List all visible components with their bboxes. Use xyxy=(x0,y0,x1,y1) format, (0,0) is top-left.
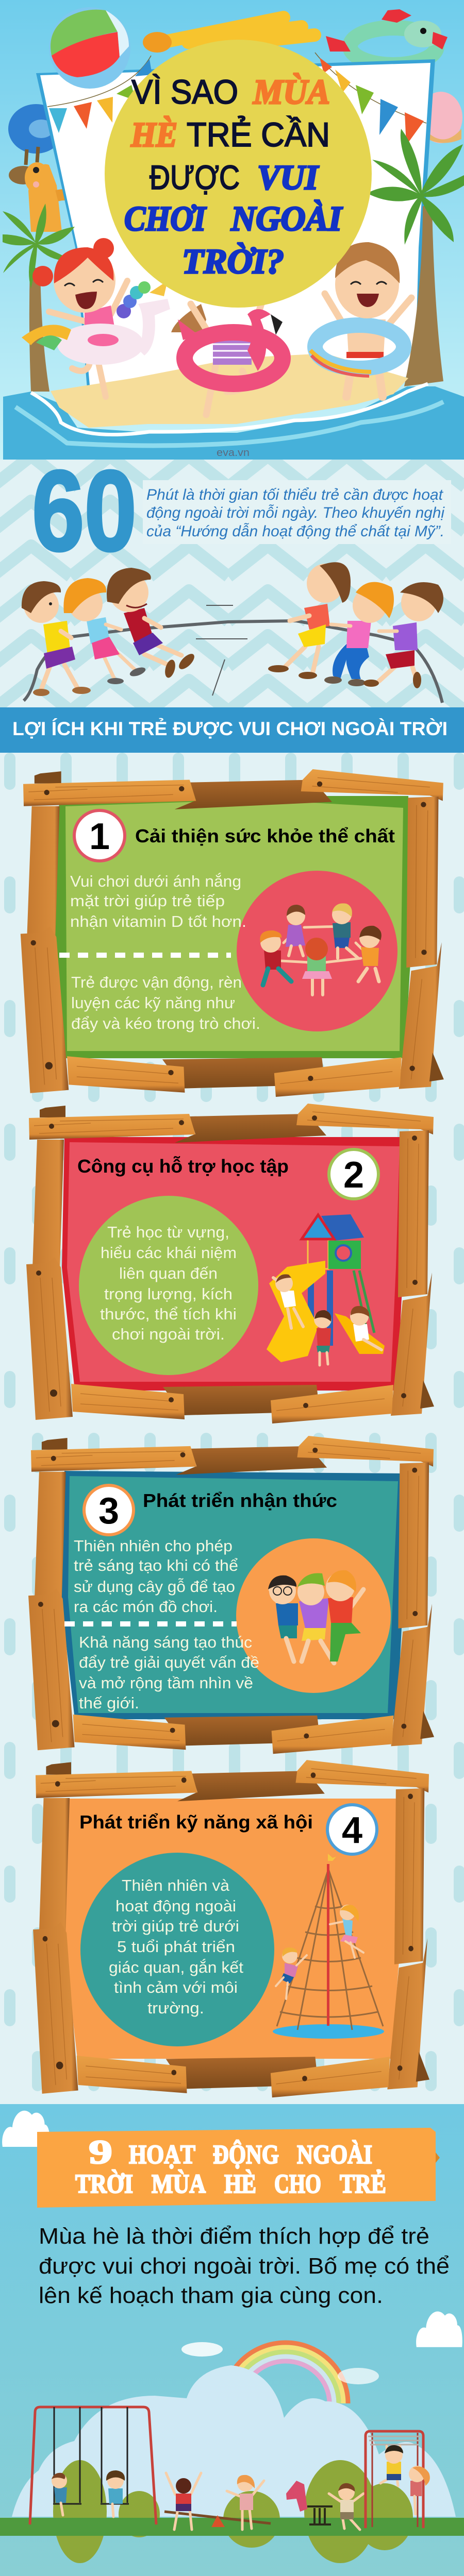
illustration: playground scene xyxy=(0,2342,464,2563)
foam xyxy=(31,384,428,435)
illustration: kids in a circle xyxy=(237,871,397,1031)
intro text: summer: Mùa hè là thời điểm thích hợp để trẻ xyxy=(39,2224,429,2249)
bubble with text: learning: chơi ngoài trời. xyxy=(112,1325,225,1343)
panel: benefit 1 xyxy=(21,769,444,1097)
text: creativity: trẻ sáng tạo khi có thể xyxy=(74,1556,238,1574)
heading: Công cụ hỗ trợ học tập xyxy=(77,1156,289,1177)
number 3 xyxy=(84,1485,134,1535)
panel: benefit 3 xyxy=(28,1436,434,1754)
kid 1 xyxy=(22,581,91,696)
icon: blue ring float xyxy=(8,104,64,154)
text: problem solving: thế giới. xyxy=(79,1694,139,1712)
seesaw xyxy=(164,2473,271,2530)
wood frame xyxy=(21,769,444,1097)
bubble with text: learning: hiểu các khái niệm xyxy=(101,1244,237,1262)
text: skills xyxy=(71,973,260,1032)
number 3: 3 xyxy=(98,1490,119,1532)
bubble with text: social: hoạt động ngoài xyxy=(115,1897,236,1915)
title: ĐƯỢC xyxy=(150,158,240,196)
bubble with text: learning: liên quan đến xyxy=(119,1264,218,1282)
heading band: benefits xyxy=(0,707,464,753)
panel background xyxy=(63,1799,405,2059)
intro text: summer xyxy=(39,2224,450,2308)
text: creativity xyxy=(74,1537,238,1616)
icon: right palm tree xyxy=(367,129,464,386)
logo: eva.vn xyxy=(217,447,250,459)
text: problem solving xyxy=(79,1633,259,1712)
illustration: boy with blue ring xyxy=(310,242,411,397)
banner: 9 activities xyxy=(37,2128,440,2208)
panel background xyxy=(52,796,412,1058)
illustration: three kids xyxy=(236,1538,391,1693)
wood frame xyxy=(33,1760,429,2097)
bubble with text: social: 5 tuổi phát triển xyxy=(117,1938,235,1956)
text block: 60 minutes: của “Hướng dẫn hoạt động thể chất tại Mỹ”. xyxy=(146,523,444,540)
bubble with text: social xyxy=(80,1853,274,2046)
text block: 60 minutes: động ngoài trời mỗi ngày. Theo khuyến nghị xyxy=(146,504,445,521)
text: skills: đẩy và kéo trong trò chơi. xyxy=(71,1014,260,1032)
icon: fish ring float xyxy=(326,9,448,65)
swing set xyxy=(30,2407,156,2524)
monkey bars xyxy=(366,2431,430,2528)
panel: benefit 4 xyxy=(33,1760,429,2097)
wood frame xyxy=(28,1436,434,1754)
panel: benefit 2 xyxy=(26,1104,434,1423)
bubble with text: learning: trọng lượng, kích xyxy=(104,1285,233,1303)
title: TRỜI? xyxy=(182,242,284,281)
section background: hero sky xyxy=(0,0,464,460)
water xyxy=(3,386,464,460)
banner heading: NGOÀI xyxy=(297,2140,372,2170)
title: HÈ xyxy=(130,115,177,154)
number 1 xyxy=(74,810,125,861)
bubble with text: learning: Trẻ học từ vựng, xyxy=(107,1223,229,1241)
bubble with text: social: tình cảm với môi xyxy=(114,1978,238,1996)
illustration: girl with flamingo float xyxy=(171,299,283,415)
ground xyxy=(0,2518,464,2536)
banner heading: HÈ xyxy=(224,2169,256,2199)
bubble with text: social: trời giúp trẻ dưới xyxy=(112,1917,239,1935)
text: problem solving: đẩy trẻ giải quyết vấn đề xyxy=(79,1653,259,1671)
heading: Phát triển kỹ năng xã hội xyxy=(79,1811,313,1833)
banner heading: TRỜI xyxy=(75,2169,133,2199)
banner heading: TRẺ xyxy=(340,2169,386,2199)
title: CHƠI xyxy=(124,199,207,238)
intro text: summer: lên kế hoạch tham gia cùng con. xyxy=(39,2283,383,2308)
rope xyxy=(24,621,442,703)
illustration: climbing net xyxy=(273,1854,384,2039)
hills xyxy=(53,2460,413,2563)
text: vitamin D: mặt trời giúp trẻ tiếp xyxy=(70,892,225,910)
bubble with text: learning: thước, thể tích khi xyxy=(100,1305,237,1323)
kid 4 xyxy=(268,562,351,679)
text: problem solving: và mở rộng tầm nhìn về xyxy=(79,1674,253,1692)
icon: left palm tree xyxy=(3,204,75,392)
number 2 xyxy=(329,1149,378,1199)
kid 3 xyxy=(107,568,197,679)
banner heading: HOẠT xyxy=(129,2140,195,2170)
text: creativity: sử dụng cây gỗ để tạo xyxy=(74,1578,235,1596)
title: VÌ SAO xyxy=(131,73,238,111)
icon: giraffe float xyxy=(9,147,77,232)
spring horse xyxy=(286,2481,333,2524)
banner heading xyxy=(75,2133,386,2199)
banner heading: MÙA xyxy=(152,2169,206,2199)
section background: zigzag xyxy=(0,460,464,707)
big number 60: 60 xyxy=(32,447,137,575)
hero illustration xyxy=(3,7,464,460)
icon: beach ball xyxy=(49,7,130,89)
illustration: playground slide xyxy=(267,1214,385,1365)
number 4: 4 xyxy=(342,1810,362,1851)
heading: Cải thiện sức khỏe thể chất xyxy=(135,825,395,846)
title: TRẺ CẦN xyxy=(187,115,330,154)
text: problem solving: Khả năng sáng tạo thúc xyxy=(79,1633,252,1651)
section background: activities sky xyxy=(0,2104,464,2576)
wood frame xyxy=(26,1104,434,1423)
icon: yellow pool float xyxy=(143,18,314,53)
panel background xyxy=(62,1137,408,1391)
banner heading: ĐỘNG xyxy=(213,2140,279,2170)
heading: Phát triển nhận thức xyxy=(143,1490,337,1511)
intro text: summer: được vui chơi ngoài trời. Bố mẹ có thể xyxy=(39,2253,450,2279)
sand beach xyxy=(51,353,408,428)
background clouds xyxy=(12,2365,456,2517)
illustration: tug of war xyxy=(22,562,443,703)
icon: donut float xyxy=(419,92,462,143)
text: creativity: Thiên nhiên cho phép xyxy=(74,1537,233,1555)
title: MÙA xyxy=(253,72,330,111)
number 2: 2 xyxy=(343,1155,364,1196)
title: VUI xyxy=(257,158,319,197)
text block: 60 minutes: Phút là thời gian tối thiểu trẻ cần được hoạt xyxy=(146,486,444,503)
title: NGOÀI xyxy=(230,199,343,238)
bubble with text: social: Thiên nhiên và xyxy=(122,1876,230,1894)
banner heading: CHO xyxy=(274,2170,321,2199)
text: vitamin D: nhận vitamin D tốt hơn. xyxy=(70,912,246,930)
bubble with text: social: giác quan, gắn kết xyxy=(109,1958,243,1976)
kid 5 xyxy=(324,582,394,686)
text: creativity: ra các món đồ chơi. xyxy=(74,1598,218,1616)
title circle xyxy=(105,40,372,308)
text: vitamin D xyxy=(70,872,246,930)
kid 2 xyxy=(63,578,146,684)
text: skills: luyện các kỹ năng như xyxy=(71,994,235,1012)
heading band: benefits: LỢI ÍCH KHI TRẺ ĐƯỢC VUI CHƠI NGOÀI TRỜI xyxy=(12,718,448,739)
panel background xyxy=(61,1471,407,1719)
kid 6 xyxy=(363,582,443,688)
text: vitamin D: Vui chơi dưới ánh nắng xyxy=(70,872,241,890)
illustration: girl with unicorn float xyxy=(22,238,170,397)
number 4 xyxy=(327,1805,377,1854)
clouds: top xyxy=(2,2111,462,2347)
kid with stripes xyxy=(329,2483,363,2530)
bunting flags xyxy=(47,53,426,145)
text block: 60 minutes xyxy=(143,480,451,544)
section background: drips xyxy=(0,753,464,2104)
banner heading: 9 xyxy=(89,2133,112,2171)
bubble with text: social: trường. xyxy=(147,1999,204,2017)
panel: white photo frame xyxy=(36,59,435,394)
bubble with text: learning xyxy=(79,1196,258,1375)
title xyxy=(124,72,343,281)
rainbow xyxy=(223,2343,348,2403)
number 1: 1 xyxy=(89,816,110,857)
text: skills: Trẻ được vận động, rèn xyxy=(71,973,242,991)
